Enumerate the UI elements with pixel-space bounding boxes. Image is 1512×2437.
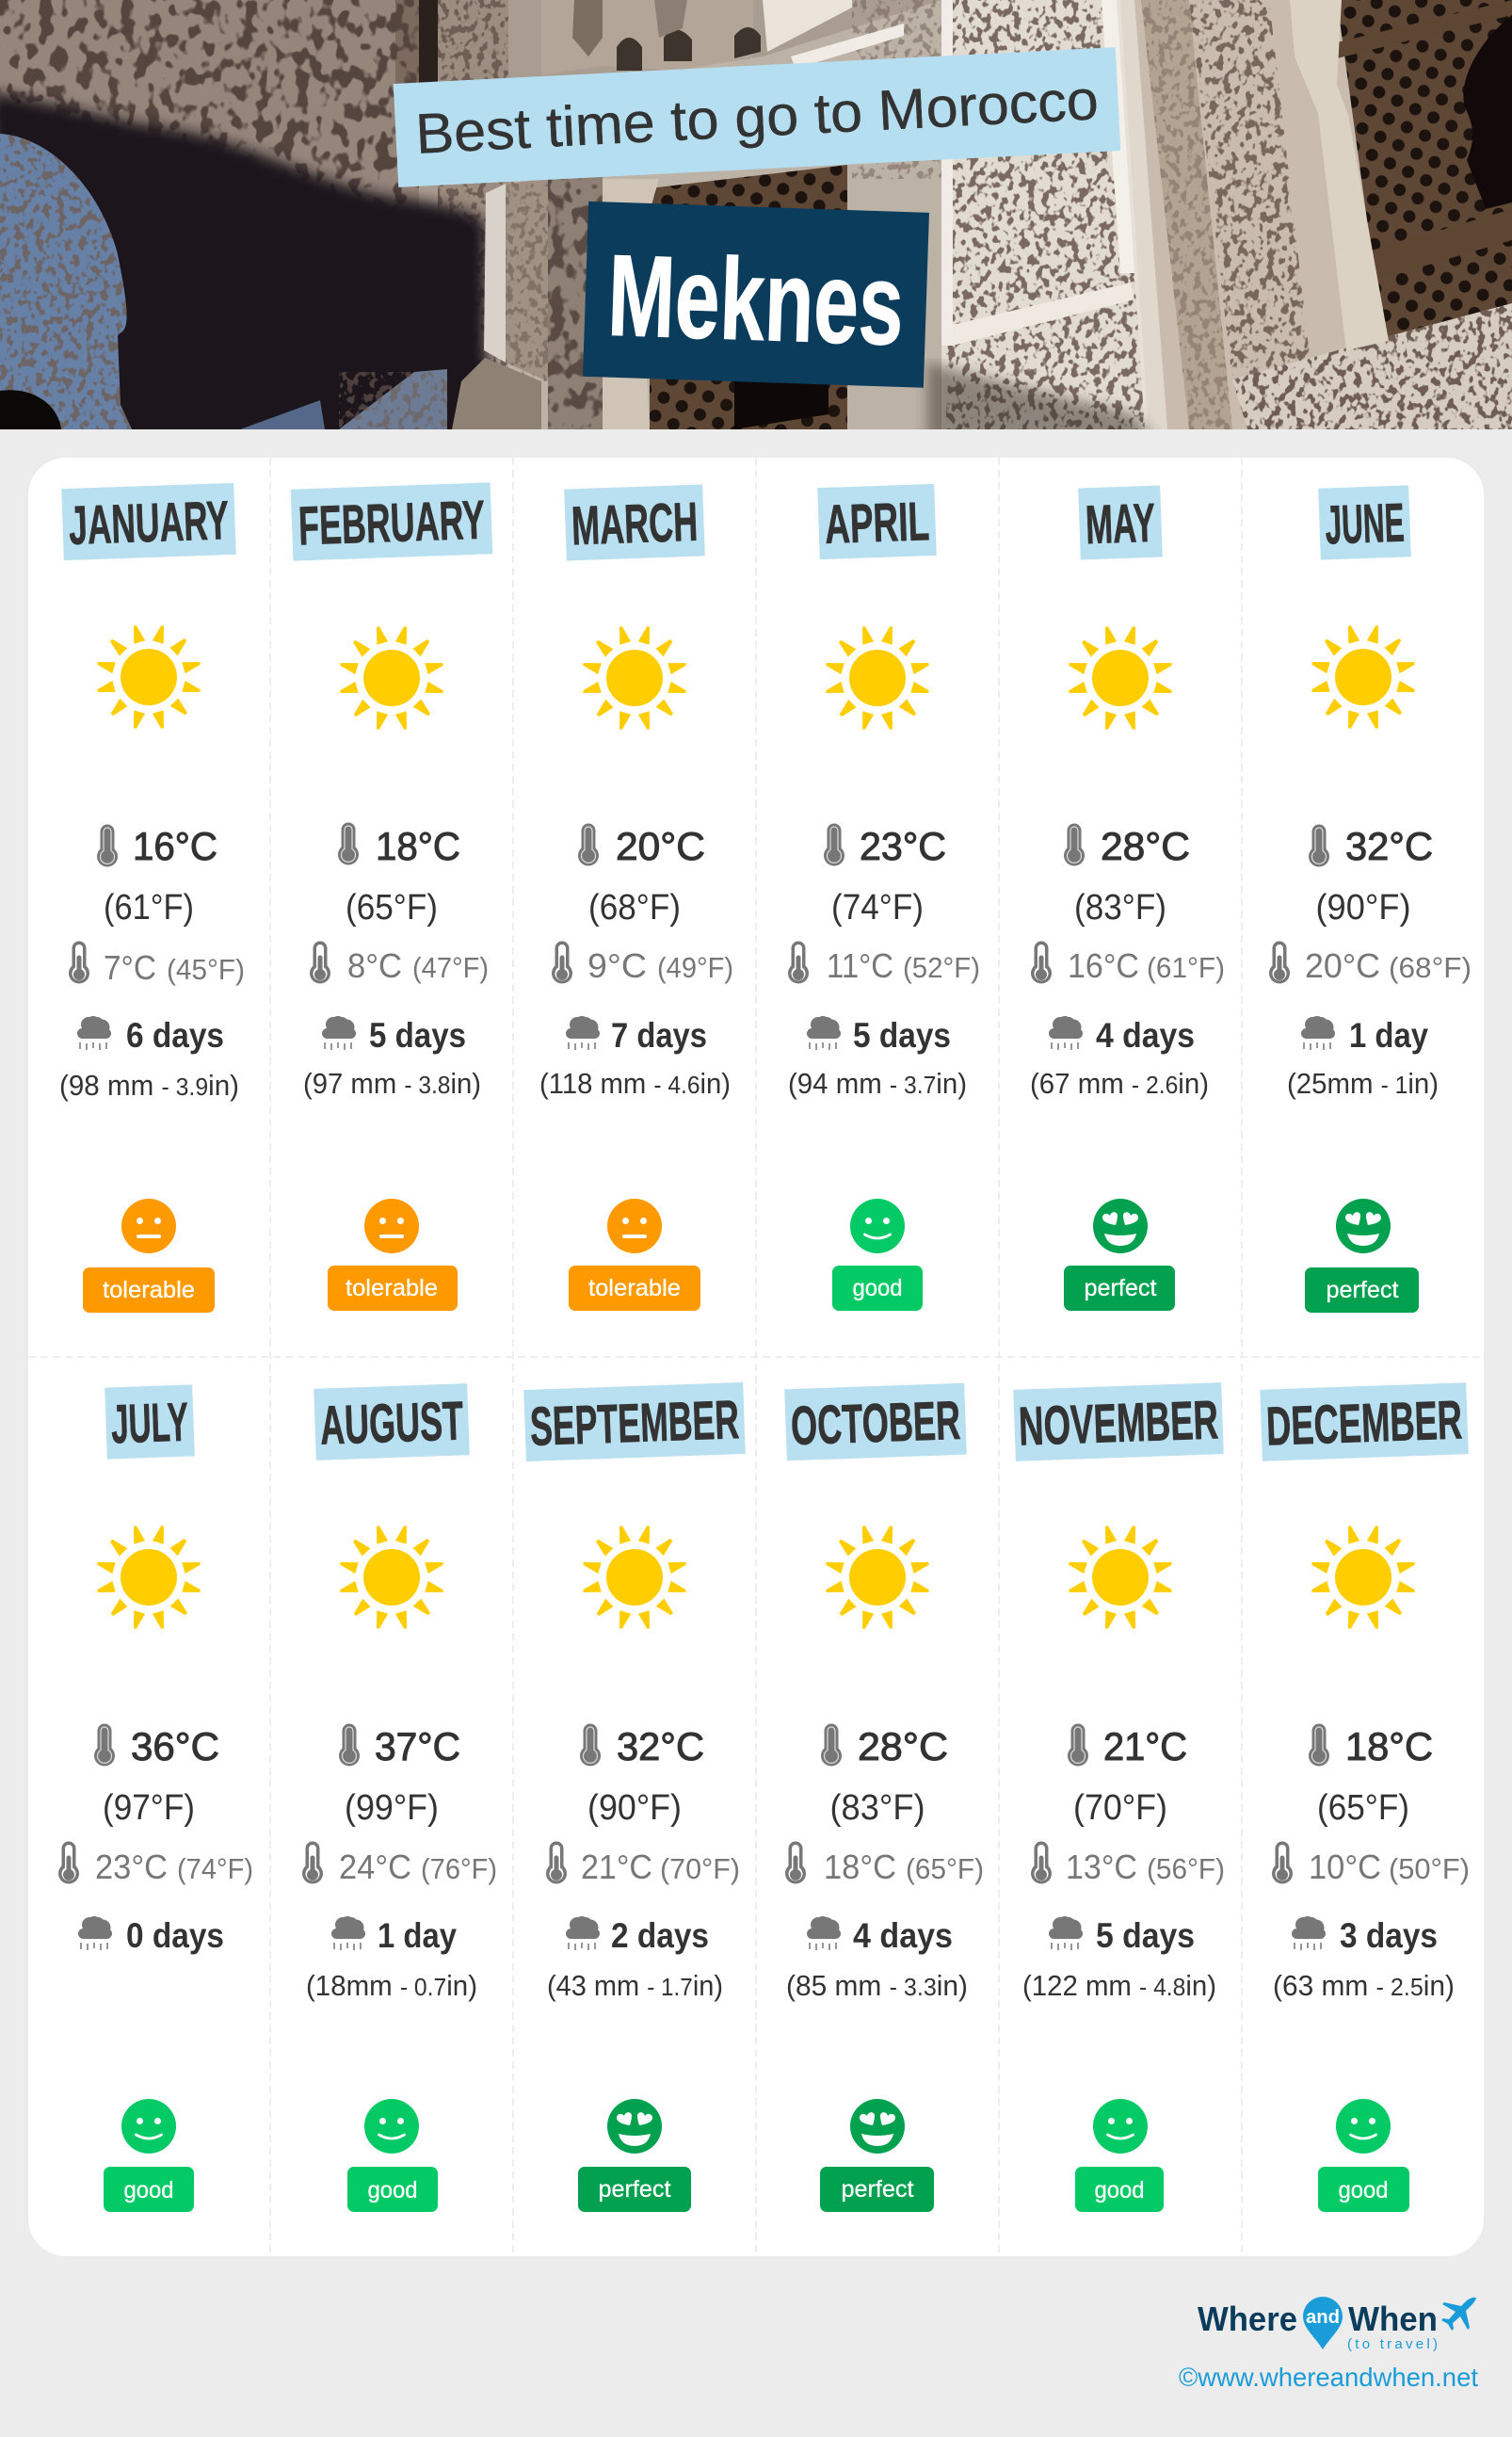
low temperature: 21°C: [581, 1848, 652, 1886]
icon: rain cloud: [1049, 1016, 1083, 1050]
high temperature: 20°C: [616, 824, 705, 868]
icon: rain cloud: [322, 1016, 356, 1050]
low temperature: 24°C: [339, 1848, 411, 1886]
month label: [564, 484, 705, 561]
month label: JANUARY: [68, 490, 230, 557]
high temperature fahrenheit: (83°F): [830, 1788, 925, 1828]
high temperature fahrenheit: (61°F): [104, 888, 194, 928]
low temperature fahrenheit: (45°F): [167, 953, 245, 986]
icon: sun: [583, 626, 686, 730]
main white card: [28, 458, 1484, 2256]
low temperature fahrenheit: (61°F): [1147, 951, 1225, 984]
month label: [1013, 1382, 1224, 1461]
panel: December: [1260, 1382, 1470, 2212]
icon: sun: [1069, 626, 1172, 730]
city banner: Meknes: Meknes: [606, 232, 906, 370]
panel: June: [1269, 485, 1472, 1313]
icon: thermometer low: [785, 1842, 806, 1884]
rating badge: [1318, 2167, 1409, 2212]
icon: thermometer low: [310, 942, 330, 984]
month label: [314, 1383, 470, 1461]
icon: thermometer high: [580, 1723, 601, 1767]
icon: sun: [97, 1525, 201, 1629]
rating badge: [1075, 2167, 1164, 2212]
icon: thermometer low: [552, 942, 572, 984]
month label: OCTOBER: [790, 1390, 961, 1457]
rating badge: [578, 2167, 691, 2212]
panel: January: [59, 483, 245, 1313]
low temperature: 7°C: [104, 948, 156, 987]
icon: thermometer high: [1064, 823, 1085, 866]
high temperature: 16°C: [133, 824, 217, 868]
muqarnas vaulting: [541, 0, 904, 75]
rating badge: good: [1094, 2177, 1145, 2203]
icon: thermometer high: [578, 823, 599, 866]
icon: thermometer low: [1031, 1842, 1052, 1884]
month label: [1318, 485, 1411, 560]
rating badge: tolerable: [588, 1275, 681, 1301]
low temperature: 20°C: [1305, 946, 1380, 985]
central window opening: [650, 165, 847, 429]
icon: sun: [340, 1525, 443, 1629]
low temperature fahrenheit: (56°F): [1147, 1852, 1225, 1885]
high temperature fahrenheit: (70°F): [1073, 1788, 1167, 1828]
panel: July: [58, 1384, 253, 2212]
rainfall: (43 mm - 1.7in): [547, 1969, 723, 2002]
rating badge: [569, 1266, 700, 1311]
icon: rain cloud: [331, 1916, 365, 1950]
sunlit pier: [484, 184, 506, 363]
rating badge: perfect: [1326, 1277, 1399, 1303]
month label: NOVEMBER: [1018, 1389, 1219, 1458]
header photo: carved stucco wall: [0, 0, 1512, 443]
low temperature fahrenheit: (50°F): [1389, 1852, 1470, 1885]
icon: thermometer low: [1272, 1842, 1293, 1884]
rating badge: good: [853, 1275, 902, 1301]
high temperature: 37°C: [375, 1724, 460, 1768]
month label: APRIL: [824, 491, 930, 556]
panel: April: [788, 484, 980, 1311]
carved texture layers: [0, 0, 419, 203]
low temperature: 23°C: [95, 1848, 168, 1886]
rainy days: 1 day: [1349, 1016, 1428, 1055]
rainy days: 3 days: [1340, 1916, 1438, 1955]
rainy days: 6 days: [126, 1016, 224, 1055]
icon: thermometer low: [302, 1842, 323, 1884]
rating badge: [104, 2167, 194, 2212]
high temperature: 32°C: [1345, 824, 1433, 868]
month label: FEBRUARY: [298, 490, 486, 557]
high temperature fahrenheit: (83°F): [1074, 888, 1166, 928]
high temperature fahrenheit: (65°F): [346, 888, 438, 928]
month label: SEPTEMBER: [529, 1389, 740, 1458]
low temperature: 10°C: [1309, 1848, 1381, 1886]
icon: rating face: [607, 2099, 662, 2154]
icon: sun: [826, 1525, 929, 1629]
panel: November: [1013, 1382, 1225, 2212]
month label: [523, 1382, 746, 1461]
month label: AUGUST: [319, 1390, 464, 1457]
rainfall: (98 mm - 3.9in): [59, 1069, 239, 1102]
icon: rating face: [121, 2099, 176, 2154]
rating badge: tolerable: [103, 1277, 195, 1303]
rating badge: [1305, 1267, 1419, 1313]
rainy days: 4 days: [853, 1916, 953, 1955]
icon: thermometer high: [94, 1723, 115, 1767]
title banner: Best time to go to Morocco: [394, 47, 1120, 187]
blue shaded arch: [0, 134, 132, 429]
rainy days: 4 days: [1096, 1016, 1195, 1055]
icon: thermometer high: [1309, 825, 1329, 867]
rating badge: perfect: [842, 2176, 914, 2203]
rainy days: 5 days: [369, 1016, 466, 1055]
icon: rain cloud: [566, 1916, 600, 1950]
high temperature: 36°C: [131, 1724, 219, 1768]
rainfall: (85 mm - 3.3in): [786, 1969, 968, 2002]
panel: August: [302, 1383, 497, 2212]
city banner: Meknes: [583, 202, 929, 388]
icon: rating face: [1336, 1199, 1391, 1253]
icon: rain cloud: [1292, 1916, 1326, 1950]
month label: [817, 484, 937, 559]
high temperature fahrenheit: (65°F): [1317, 1788, 1409, 1828]
high temperature fahrenheit: (68°F): [588, 888, 681, 928]
low temperature fahrenheit: (76°F): [421, 1852, 497, 1885]
rating badge: [832, 1266, 923, 1311]
rating badge: good: [367, 2177, 418, 2203]
rating badge: good: [124, 2177, 173, 2203]
panel: March: [539, 484, 733, 1311]
icon: thermometer high: [821, 1723, 842, 1767]
rating badge: [83, 1267, 215, 1313]
rainy days: 0 days: [126, 1916, 224, 1955]
high temperature fahrenheit: (90°F): [587, 1788, 682, 1828]
icon: rain cloud: [78, 1916, 112, 1950]
dark wooden lattice: [1337, 0, 1512, 344]
low temperature: 11°C: [827, 946, 893, 985]
rainfall: (63 mm - 2.5in): [1273, 1969, 1455, 2002]
rating badge: tolerable: [346, 1275, 438, 1301]
icon: rating face: [607, 1199, 662, 1253]
icon: thermometer low: [58, 1842, 79, 1884]
icon: sun: [826, 626, 929, 730]
rainy days: 7 days: [611, 1016, 707, 1055]
panel: September: [523, 1382, 746, 2212]
rainfall: (97 mm - 3.8in): [303, 1067, 481, 1100]
logo: Where and When: When: [1348, 2300, 1438, 2338]
low temperature: 9°C: [587, 946, 647, 985]
icon: thermometer high: [1068, 1723, 1088, 1767]
high temperature: 23°C: [860, 824, 946, 868]
panel: October: [784, 1383, 984, 2212]
high temperature fahrenheit: (90°F): [1316, 888, 1410, 928]
icon: rain cloud: [1049, 1916, 1083, 1950]
icon: sun: [1311, 625, 1415, 729]
month label: JULY: [110, 1392, 189, 1455]
high temperature: 21°C: [1103, 1724, 1187, 1768]
high temperature: 32°C: [617, 1724, 704, 1768]
icon: sun: [1069, 1525, 1172, 1629]
month label: [105, 1384, 195, 1460]
month label: [291, 482, 492, 561]
low temperature: 16°C: [1068, 946, 1139, 985]
month label: [784, 1383, 967, 1461]
icon: rain cloud: [807, 1916, 841, 1950]
high temperature fahrenheit: (97°F): [103, 1788, 195, 1828]
rainy days: 5 days: [1096, 1916, 1195, 1955]
icon: rain cloud: [1301, 1016, 1335, 1050]
icon: thermometer low: [1269, 942, 1290, 984]
low temperature fahrenheit: (70°F): [660, 1852, 740, 1885]
low temperature fahrenheit: (49°F): [657, 951, 733, 984]
rainfall: (18mm - 0.7in): [306, 1969, 477, 2002]
icon: airplane: [1441, 2298, 1476, 2331]
icon: rain cloud: [807, 1016, 841, 1050]
low temperature fahrenheit: (65°F): [906, 1852, 984, 1885]
rainy days: 1 day: [378, 1916, 457, 1955]
low temperature: 13°C: [1066, 1848, 1137, 1886]
low temperature: 18°C: [824, 1848, 896, 1886]
rainy days: 2 days: [611, 1916, 709, 1955]
icon: thermometer high: [1309, 1723, 1329, 1767]
month label: [61, 483, 236, 560]
logo: Where and When: Where: [1198, 2300, 1297, 2338]
low temperature: 8°C: [347, 946, 402, 985]
month label: JUNE: [1324, 492, 1406, 556]
month label: MARCH: [571, 492, 699, 557]
rainfall: (118 mm - 4.6in): [539, 1067, 731, 1100]
icon: sun: [340, 626, 443, 730]
rating badge: [328, 1266, 458, 1311]
icon: thermometer high: [97, 825, 118, 867]
pale lattice strip and pilasters: [1116, 0, 1167, 429]
rainy days: 5 days: [853, 1016, 951, 1055]
rating badge: perfect: [1085, 1275, 1157, 1301]
shadow across wall: [0, 92, 494, 443]
low temperature fahrenheit: (47°F): [412, 951, 489, 984]
source url: ©www.whereandwhen.net: [1179, 2363, 1478, 2392]
icon: rating face: [850, 2099, 905, 2154]
month label: MAY: [1085, 492, 1156, 556]
icon: rating face: [850, 1199, 905, 1253]
icon: thermometer high: [338, 823, 359, 865]
high temperature: 28°C: [1101, 824, 1190, 868]
rainfall: (25mm - 1in): [1287, 1067, 1439, 1100]
rainfall: (122 mm - 4.8in): [1022, 1969, 1216, 2002]
icon: thermometer low: [546, 1842, 567, 1884]
low temperature fahrenheit: (52°F): [903, 951, 980, 984]
panel: February: [291, 482, 492, 1311]
icon: rating face: [1093, 1199, 1148, 1253]
icon: thermometer low: [788, 942, 809, 984]
rating badge: good: [1339, 2177, 1388, 2203]
high temperature: 18°C: [1345, 1724, 1433, 1768]
icon: rating face: [1336, 2099, 1391, 2154]
rating badge: perfect: [599, 2176, 671, 2203]
high temperature fahrenheit: (74°F): [831, 888, 924, 928]
icon: map pin: [1303, 2297, 1343, 2349]
high temperature: 28°C: [858, 1724, 948, 1768]
low temperature fahrenheit: (74°F): [177, 1852, 253, 1885]
title banner: Best time to go to Morocco: Best time to go to Morocco: [414, 68, 1100, 166]
icon: rating face: [1093, 2099, 1148, 2154]
rainfall: (67 mm - 2.6in): [1030, 1067, 1209, 1100]
icon: rating face: [364, 2099, 419, 2154]
panel: May: [1030, 486, 1225, 1311]
month label: [1078, 486, 1163, 559]
rating badge: [820, 2167, 934, 2212]
logo: Where and When: (to travel): [1347, 2336, 1438, 2352]
rainfall: (94 mm - 3.7in): [788, 1067, 967, 1100]
high temperature: 18°C: [376, 824, 460, 868]
high temperature fahrenheit: (99°F): [345, 1788, 439, 1828]
low temperature fahrenheit: (68°F): [1389, 951, 1472, 984]
icon: thermometer high: [339, 1723, 360, 1767]
icon: rating face: [364, 1199, 419, 1253]
rating badge: [1064, 1266, 1175, 1311]
icon: sun: [1311, 1525, 1415, 1629]
rating badge: [347, 2167, 438, 2212]
icon: thermometer low: [1031, 942, 1052, 984]
icon: thermometer low: [69, 942, 89, 984]
icon: rating face: [121, 1199, 176, 1253]
icon: sun: [97, 625, 201, 729]
icon: map pin: and: [1306, 2307, 1340, 2328]
logo: Where and When: [1198, 2297, 1476, 2352]
icon: rain cloud: [77, 1016, 111, 1050]
icon: thermometer high: [824, 823, 844, 866]
icon: rain cloud: [566, 1016, 600, 1050]
icon: sun: [583, 1525, 686, 1629]
